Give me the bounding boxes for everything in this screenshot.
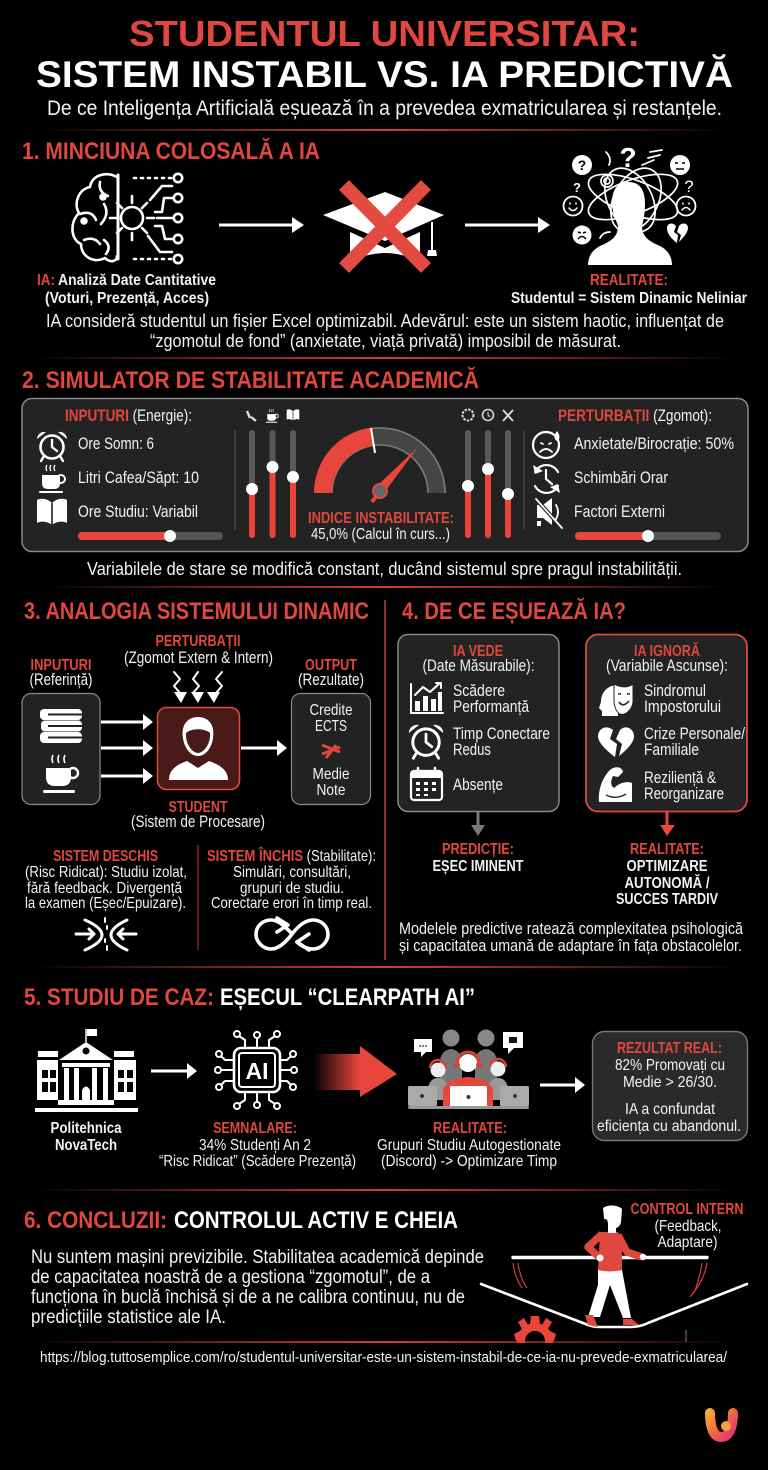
- icon: crossed-out graduation cap: [323, 185, 444, 268]
- inputs list: Litri Cafea/Săpt: 10: [78, 469, 199, 487]
- label: realitate: (Discord) -> Optimizare Timp: [381, 1153, 557, 1170]
- prediction: [432, 841, 524, 875]
- label: realitate: REALITATE:: [433, 1120, 507, 1137]
- closed system text: grupuri de studiu.: [240, 880, 344, 897]
- label: control intern: (Feedback,: [654, 1218, 722, 1235]
- reality: [616, 841, 719, 908]
- heading 5: EȘECUL “CLEARPATH AI”: [220, 984, 475, 1011]
- panel: rezultat real: 82% Promovați cu: [615, 1057, 725, 1074]
- panel: IA ignoră: Reziliență &: [644, 769, 716, 787]
- inputs list: Ore Somn: 6: [78, 435, 154, 453]
- panel: inputs box: [22, 694, 100, 804]
- arrow: output: [241, 740, 287, 756]
- icon: student with chaotic thoughts: [564, 142, 696, 265]
- panel: IA vede: Scădere: [453, 682, 505, 700]
- icon: flexed arm: [599, 767, 632, 802]
- open system text: SISTEM DESCHIS: [53, 848, 158, 865]
- label: IA: (Voturi, Prezență, Acces): [45, 290, 209, 307]
- open system text: [25, 848, 187, 912]
- heading 6: 6. CONCLUZII:: [24, 1207, 167, 1234]
- disturbances list: Schimbări Orar: [574, 469, 668, 487]
- section 3: analogia sistemului dinamic: [22, 598, 376, 950]
- panel: IA vede: Absențe: [453, 776, 503, 794]
- panel: rezultat real: [592, 1032, 748, 1140]
- disturbances list: Factori Externi: [574, 503, 665, 521]
- rope: [481, 1284, 747, 1327]
- open system text: la examen (Eșec/Epuizare).: [25, 895, 186, 912]
- panel: rezultat real: REZULTAT REAL:: [617, 1040, 722, 1057]
- text block: predicțiile statistice ale IA.: [31, 1307, 226, 1328]
- title: De ce Inteligența Artificială eșuează în a prevedea exmatricularea și restanțele.: [47, 97, 722, 120]
- open system text: (Risc Ridicat): Studiu izolat,: [25, 864, 187, 881]
- text block: [46, 311, 724, 351]
- label: realitate: [511, 272, 747, 307]
- label: perturbații: PERTURBAȚII: [156, 633, 240, 650]
- prediction: PREDICȚIE:: [442, 841, 514, 858]
- panel: IA vede: Performanță: [453, 698, 530, 716]
- icon: diverging system: [76, 918, 136, 950]
- panel: simulator: [22, 398, 748, 552]
- panel: IA vede: [398, 634, 559, 812]
- label: perturbații: (Zgomot Extern & Intern): [124, 649, 273, 667]
- caption: Variabilele de stare se modifică constant, ducând sistemul spre pragul instabilității.: [87, 559, 682, 579]
- panel: output box: Medie: [312, 766, 350, 783]
- label: inputuri: INPUTURI: [30, 657, 92, 674]
- label: semnalare: [159, 1120, 356, 1170]
- panel: rezultat real: IA a confundat: [625, 1101, 715, 1118]
- panel: rezultat real: Medie > 26/30.: [623, 1074, 717, 1091]
- heading 2: 2. SIMULATOR DE STABILITATE ACADEMICĂ: [22, 366, 479, 394]
- panel: IA vede: Redus: [453, 741, 491, 759]
- text block: “zgomotul de fond” (anxietate, viață privată) imposibil de măsurat.: [150, 331, 621, 351]
- reality: REALITATE:: [630, 841, 704, 858]
- label: IA: [37, 272, 216, 307]
- disturbances list: Anxietate/Birocrație: 50%: [574, 435, 734, 453]
- title: [36, 13, 733, 120]
- label: Politehnica NovaTech: [50, 1120, 122, 1154]
- section 6: concluzii: [24, 1201, 747, 1363]
- arrow: [219, 217, 304, 233]
- panel: IA ignoră: Familiale: [644, 741, 699, 759]
- panel: output box: [292, 694, 370, 804]
- heading 3: 3. ANALOGIA SISTEMULUI DINAMIC: [24, 598, 369, 625]
- label: inputuri: [30, 657, 92, 689]
- arrow: to reality: [660, 812, 675, 836]
- label: inputuri: (Referință): [30, 671, 92, 689]
- label: output: OUTPUT: [305, 657, 357, 674]
- label: realitate: REALITATE:: [590, 272, 668, 289]
- label: control intern: [630, 1201, 744, 1251]
- label: student: STUDENT: [168, 799, 228, 816]
- icon: mask: [599, 684, 633, 716]
- heading 1: 1. MINCIUNA COLOSALĂ A IA: [22, 137, 320, 165]
- gear: [510, 1316, 560, 1363]
- icon: study group: [408, 1030, 529, 1109]
- icons: moods: ?: [619, 142, 637, 173]
- text block: funcționa în buclă închisă și de a ne calibra continuu, nu de: [31, 1287, 465, 1308]
- panel: output box: Note: [316, 782, 346, 799]
- closed system text: Corectare erori în timp real.: [211, 895, 372, 912]
- icon: closed loop: [256, 918, 328, 950]
- arrows: perturbations: [174, 672, 222, 703]
- gauge: [308, 428, 454, 543]
- label: realitate: [377, 1120, 561, 1170]
- reality: OPTIMIZARE: [626, 858, 708, 875]
- text block: Nu suntem mașini previzibile. Stabilitatea academică depinde: [31, 1247, 484, 1268]
- icon: calendar: [411, 768, 442, 800]
- arrow: to prediction: [471, 812, 485, 836]
- arrow: [465, 217, 550, 233]
- icons: moods: ?: [684, 177, 694, 196]
- panel: IA ignoră: [586, 634, 747, 812]
- icon: AI chip: [215, 1031, 297, 1109]
- icon: brain and circuit: [72, 174, 182, 263]
- label: semnalare: 34% Studenți An 2: [199, 1137, 311, 1154]
- panel: rezultat real: eficiența cu abandonul.: [597, 1118, 741, 1135]
- label: output: (Rezultate): [298, 671, 364, 689]
- panel: student: [158, 708, 240, 790]
- text block: [399, 919, 743, 955]
- prediction: EȘEC IMINENT: [432, 858, 524, 875]
- label: realitate: Grupuri Studiu Autogestionate: [377, 1137, 561, 1154]
- inputs list: INPUTURI (Energie):: [65, 407, 192, 425]
- panel: IA ignoră: Reorganizare: [644, 785, 724, 803]
- gauge: 45,0% (Calcul în curs...): [311, 526, 450, 543]
- section 2: simulator: [22, 366, 748, 579]
- icons: moods: ?: [578, 157, 586, 173]
- sliders right: [462, 410, 514, 538]
- label: semnalare: “Risc Ridicat” (Scădere Prezență): [159, 1153, 356, 1170]
- sliders left: [246, 409, 299, 538]
- walker: [585, 1205, 646, 1327]
- label: Politehnica NovaTech: NovaTech: [55, 1137, 117, 1154]
- closed system text: Simulări, consultări,: [233, 864, 351, 881]
- open system text: fără feedback. Divergență: [27, 880, 182, 897]
- icon: coffee: [43, 755, 78, 793]
- label: perturbații: [124, 633, 273, 667]
- heading 6: [24, 1207, 458, 1234]
- arrows: inputs to student: [101, 714, 153, 784]
- label: IA: Analiză Date Cantitative: [58, 272, 216, 289]
- icon: AI chip: AI: [246, 1058, 268, 1084]
- panel: output box: ECTS: [315, 718, 347, 735]
- label: output: [298, 657, 364, 689]
- disturbances list: PERTURBAȚII (Zgomot):: [558, 407, 712, 425]
- illustration: student on tightrope: [481, 1205, 747, 1363]
- panel: IA ignoră: Sindromul: [644, 682, 706, 700]
- icon: alarm clock: [409, 725, 443, 758]
- panel: output box: Credite: [310, 702, 353, 719]
- section 1: minciuna colosală: [22, 137, 747, 351]
- heading 4: 4. DE CE EȘUEAZĂ IA?: [402, 597, 626, 625]
- closed system text: [207, 846, 376, 912]
- section 4: de ce eșuează IA: [398, 597, 747, 955]
- reality: SUCCES TARDIV: [616, 891, 719, 908]
- big red arrow: [313, 1046, 397, 1097]
- heading 5: [24, 984, 475, 1011]
- title: SISTEM INSTABIL VS. IA PREDICTIVĂ: [36, 54, 733, 95]
- icon: university building: [35, 1029, 138, 1112]
- heading 6: CONTROLUL ACTIV E CHEIA: [174, 1207, 458, 1234]
- label: semnalare: SEMNALARE:: [213, 1120, 297, 1137]
- inputs list: Ore Studiu: Variabil: [78, 503, 198, 521]
- panel: IA ignoră: Impostorului: [644, 698, 721, 716]
- icons: moods: [564, 142, 696, 244]
- balance pole: [513, 1256, 707, 1259]
- icon: books: [40, 709, 82, 743]
- title: STUDENTUL UNIVERSITAR:: [129, 13, 640, 54]
- icons: moods: ?: [573, 180, 581, 195]
- panel: IA ignoră: IA IGNORĂ: [634, 643, 700, 660]
- arrow: [151, 1063, 197, 1079]
- label: control intern: Adaptare): [658, 1234, 718, 1251]
- gauge: INDICE INSTABILITATE:: [308, 510, 454, 527]
- label: Politehnica NovaTech: Politehnica: [50, 1120, 122, 1137]
- section 5: studiu de caz: [24, 984, 748, 1170]
- panel: IA ignoră: (Variabile Ascunse):: [606, 657, 728, 675]
- panel: IA vede: Timp Conectare: [453, 725, 550, 743]
- icon: broken heart: [598, 727, 634, 757]
- text block: [31, 1247, 484, 1328]
- label: IA: IA:: [37, 272, 55, 289]
- panel: IA vede: IA VEDE: [453, 643, 503, 660]
- panel: IA vede: (Date Măsurabile):: [422, 657, 534, 675]
- reality: AUTONOMĂ /: [624, 875, 710, 892]
- disturbances list: [533, 407, 734, 542]
- label: student: [131, 799, 265, 831]
- text block: de capacitatea noastră de a gestiona “zgomotul”, de a: [31, 1267, 430, 1288]
- heading 5: 5. STUDIU DE CAZ:: [24, 984, 214, 1011]
- logo: [710, 1413, 733, 1437]
- arrow: [540, 1077, 585, 1093]
- icon: chart: [411, 683, 443, 713]
- inputs list: [37, 407, 223, 542]
- label: student: (Sistem de Procesare): [131, 813, 265, 831]
- panel: IA ignoră: Crize Personale/: [644, 725, 745, 743]
- closed system text: SISTEM ÎNCHIS (Stabilitate):: [207, 846, 376, 865]
